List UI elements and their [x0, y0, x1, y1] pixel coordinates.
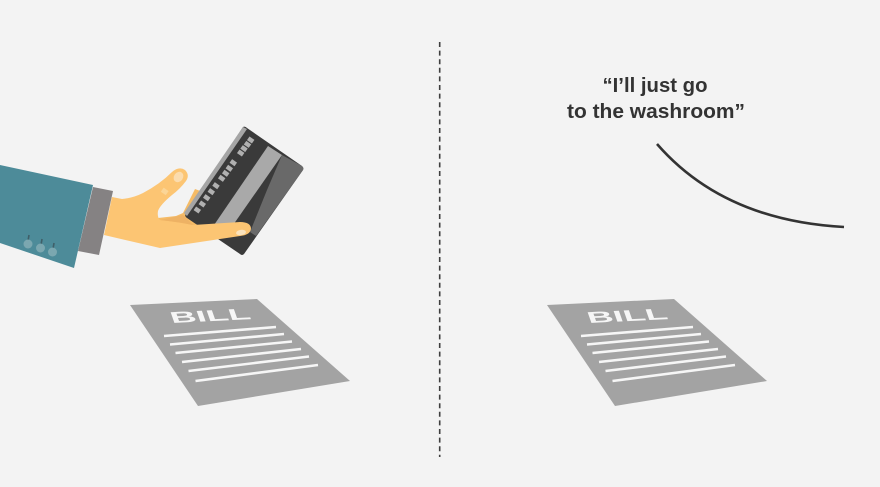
- bill heading: BILL: [585, 306, 671, 327]
- bill sheet: [547, 299, 767, 406]
- credit card: [184, 127, 303, 255]
- jacket cuff: [78, 187, 113, 255]
- curved line: [657, 144, 844, 227]
- bill: left panel: [130, 299, 350, 406]
- jacket sleeve: [0, 165, 93, 268]
- knuckle mark: [161, 188, 169, 195]
- bill text lines: [164, 327, 318, 381]
- quote text: “I’ll just go: [602, 75, 708, 97]
- card stripe: [212, 146, 282, 228]
- bill: right panel: [547, 299, 767, 406]
- illustration: hand holding out a credit card: [0, 127, 303, 268]
- card light panel: [250, 155, 303, 236]
- fingernail: upper finger: [172, 170, 185, 184]
- card number chips: [194, 136, 254, 214]
- quote text: second line: to the washroom”: [567, 101, 745, 123]
- fingernail: thumb: [236, 229, 246, 236]
- divider: dashed vertical line: [439, 42, 441, 457]
- hand: palm, index finger and thumb: [104, 168, 251, 248]
- hand: shadow between palm and fingers: [160, 215, 193, 225]
- bill heading: BILL: [168, 306, 254, 327]
- card edge highlight: [184, 127, 247, 216]
- hand: rear finger behind card: [158, 189, 203, 228]
- bill sheet: [130, 299, 350, 406]
- bill text lines: [581, 327, 735, 381]
- sleeve buttons: [24, 235, 57, 256]
